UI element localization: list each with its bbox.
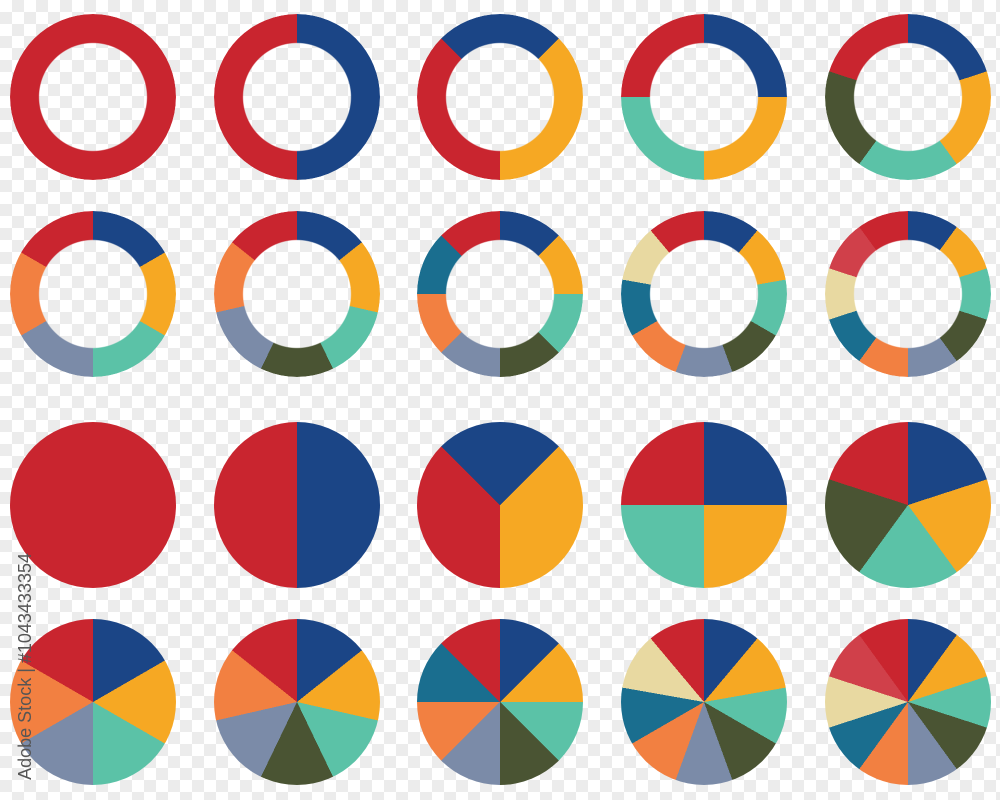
pie 7 segments (214, 619, 380, 785)
pie 5 segments (825, 422, 991, 588)
donut 1 segment (10, 14, 176, 180)
donut 5 segments (825, 14, 991, 180)
donut 8 segments (417, 211, 583, 377)
pie 4 segments (621, 422, 787, 588)
pie 10 segments (825, 619, 991, 785)
pie 6 segments (10, 619, 176, 785)
donut 7 segments (214, 211, 380, 377)
stock id vertical text: Adobe Stock | #1043433354 (15, 553, 35, 780)
pie 2 segments (214, 422, 380, 588)
donut 4 segments (621, 14, 787, 180)
donut 10 segments (825, 211, 991, 377)
pie 9 segments (621, 619, 787, 785)
donut 6 segments (10, 211, 176, 377)
pie 8 segments (417, 619, 583, 785)
pie 1 segment (10, 422, 176, 588)
donut 3 segments (417, 14, 583, 180)
donut 2 segments (214, 14, 380, 180)
pie 3 segments (417, 422, 583, 588)
donut 9 segments (621, 211, 787, 377)
